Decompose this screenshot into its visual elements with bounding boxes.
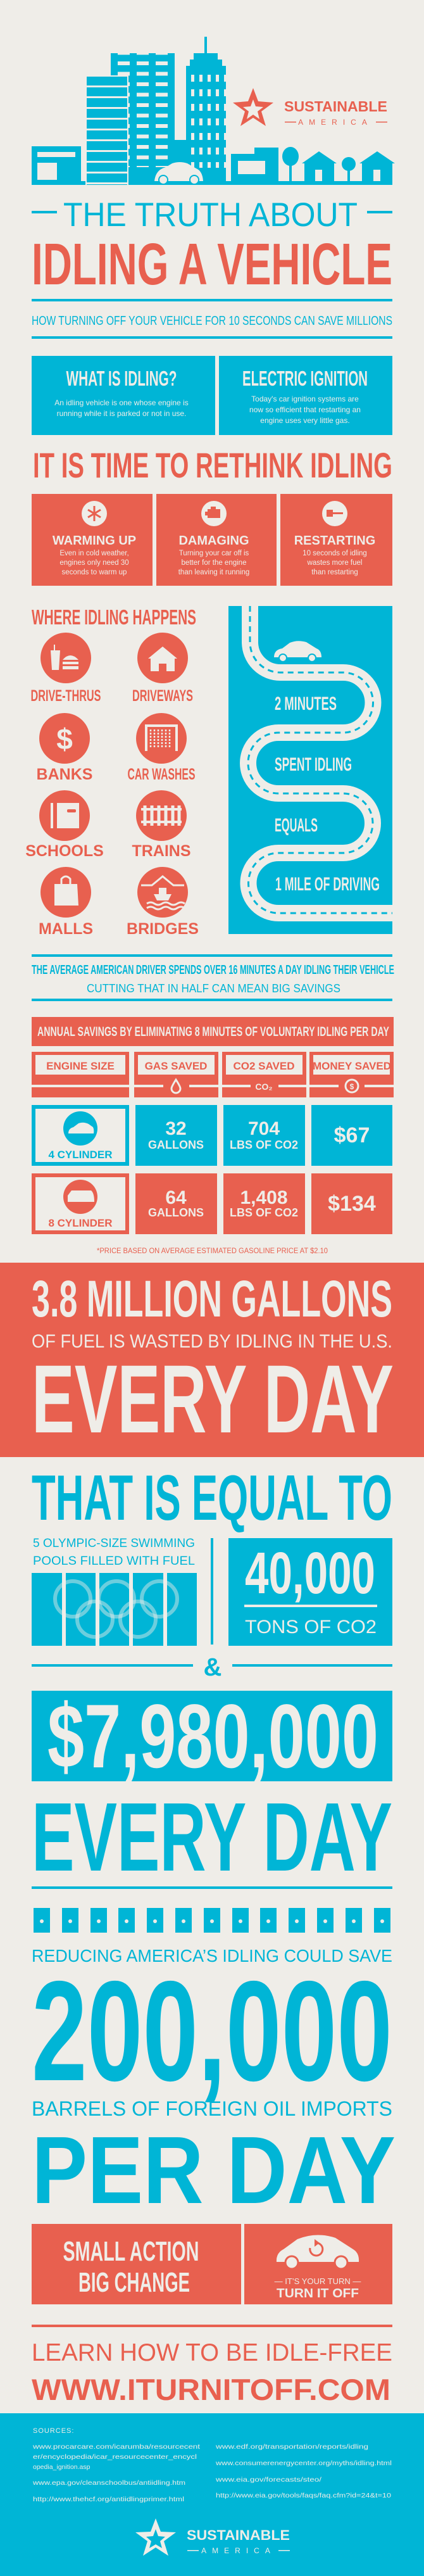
text: reducing america's idling: REDUCING AMERICA’S IDLING COULD SAVE: [32, 1946, 392, 1966]
panel: electric ignition: [219, 356, 392, 435]
row: 8 cylinder: 64: [165, 1187, 187, 1208]
icon: car with restart arrow: [277, 2235, 359, 2269]
row: 4 cylinder: LBS OF CO2: [230, 1139, 298, 1151]
panel: damaging: DAMAGING: [178, 534, 249, 548]
icon: banks: BANKS: [37, 766, 92, 783]
row: 4 cylinder: $67: [334, 1123, 370, 1147]
header: money saved: [309, 1052, 394, 1097]
icon: bridges: BRIDGES: [127, 920, 199, 938]
row: 4 cylinder: 704: [248, 1118, 280, 1139]
panel: warming up: seconds to warm up: [62, 569, 127, 576]
panel: road 2 minutes idling equals 1 mile: 2 MINUTES: [275, 693, 337, 714]
title: the truth about: THE TRUTH ABOUT: [63, 196, 358, 234]
icon: malls: [39, 867, 93, 938]
icon: trains: TRAINS: [132, 842, 191, 860]
panel: turn it off: TURN IT OFF: [277, 2287, 359, 2301]
panel: olympic pools: [32, 1537, 197, 1646]
panel: restarting: RESTARTING: [294, 534, 375, 548]
logo: sustainable america (footer): SUSTAINABLE: [187, 2527, 290, 2543]
icon: car washes: CAR WASHES: [128, 766, 195, 783]
row: 4 cylinder: GALLONS: [148, 1139, 204, 1151]
panel: what is idling: An idling vehicle is one whose engine is: [54, 398, 189, 407]
logo: sustainable america (footer): [135, 2518, 290, 2556]
panel: road 2 minutes idling equals 1 mile: [228, 606, 392, 934]
panel: olympic pools: 5 OLYMPIC-SIZE SWIMMING: [33, 1537, 195, 1550]
panel: olympic pools: POOLS FILLED WITH FUEL: [33, 1555, 195, 1568]
panel: turn it off: — IT’S YOUR TURN —: [275, 2276, 361, 2286]
footer: sources: www.epa.gov/cleanschoolbus/antiidling.htm: [32, 2479, 185, 2487]
text block: average american driver: [32, 954, 394, 1001]
row: 8 cylinder: $134: [328, 1192, 376, 1216]
panel: restarting: wastes more fuel: [307, 559, 362, 567]
footer: sources: www.procarcare.com/icarumba/resourcecent: [32, 2443, 200, 2451]
footer: sources: [0, 2413, 424, 2576]
icon: driveways: DRIVEWAYS: [132, 687, 193, 705]
logo: sustainable america (top): AMERICA: [298, 118, 373, 127]
icon: malls: MALLS: [39, 920, 93, 938]
panel: warming up: WARMING UP: [53, 534, 136, 548]
row: 8 cylinder: LBS OF CO2: [230, 1206, 298, 1219]
icon: banks: [37, 713, 92, 783]
panel: damaging: [156, 494, 277, 586]
panel: what is idling: [32, 356, 215, 435]
panel: road 2 minutes idling equals 1 mile: EQUALS: [275, 815, 318, 836]
panel: 40,000 tons of co2: [228, 1538, 392, 1646]
panel: what is idling: WHAT IS IDLING?: [66, 367, 177, 390]
footer: sources: www.edf.org/transportation/reports/idling: [215, 2443, 368, 2451]
panel: damaging: than leaving it running: [178, 569, 249, 576]
icon: drive-thrus: DRIVE-THRUS: [30, 687, 101, 705]
icon: drive-thrus: [30, 633, 101, 705]
panel: damaging: Turning your car off is: [179, 550, 249, 557]
logo: sustainable america (top): [233, 88, 387, 127]
header: gas saved: GAS SAVED: [145, 1060, 207, 1072]
row: 4 cylinder: 4 CYLINDER: [48, 1149, 113, 1161]
footer: sources: er/encyclopedia/icar_resourcecenter_encycl: [33, 2453, 197, 2461]
panel: electric ignition: engine uses very little gas.: [260, 416, 350, 425]
heading: where idling happens: WHERE IDLING HAPPENS: [32, 605, 196, 629]
header: money saved: $: [350, 1082, 354, 1091]
header: co2 saved: CO2 SAVED: [233, 1060, 295, 1072]
text: barrels of foreign oil imports: BARRELS OF FOREIGN OIL IMPORTS: [32, 2097, 392, 2120]
header: engine size: ENGINE SIZE: [46, 1060, 115, 1072]
panel: turn it off: [244, 2224, 392, 2304]
row: 4 cylinder: [32, 1105, 392, 1166]
footer: sources: http://www.thehcf.org/antiidlingprimer.html: [33, 2496, 184, 2503]
row: 8 cylinder: 1,408: [240, 1187, 288, 1208]
footer: sources: opedia_ignition.asp: [33, 2463, 90, 2471]
table: annual savings: [32, 1017, 394, 1234]
icon: schools: SCHOOLS: [25, 842, 104, 860]
icon: driveways: [132, 633, 193, 705]
icon: olympic rings: [55, 1581, 177, 1637]
panel: 3.8 million gallons every day: [0, 1263, 424, 1457]
subtitle: [32, 299, 392, 339]
panel: 40,000 tons of co2: TONS OF CO2: [245, 1617, 377, 1638]
skyline illustration: [32, 37, 395, 185]
icon: schools: [25, 790, 104, 860]
header: co2 saved: CO₂: [255, 1082, 273, 1092]
icon: key: [322, 501, 347, 526]
panel: 40,000 tons of co2: 40,000: [245, 1540, 375, 1606]
icon: car on road: [274, 641, 321, 662]
panel: restarting: [280, 494, 392, 586]
panel: warming up: engines only need 30: [59, 559, 129, 567]
panel: electric ignition: now so efficient that restarting an: [249, 405, 361, 414]
icon: snowflake: [82, 501, 107, 526]
panel: restarting: 10 seconds of idling: [302, 550, 367, 557]
header: co2 saved: [222, 1052, 306, 1097]
logo: sustainable america (footer): AMERICA: [201, 2546, 276, 2555]
ampersand divider: &: [204, 1653, 221, 1681]
panel: warming up: Even in cold weather,: [59, 550, 129, 557]
panel: damaging: better for the engine: [182, 559, 246, 567]
row: 8 cylinder: GALLONS: [148, 1206, 204, 1219]
panel: warming up: [32, 494, 153, 586]
row: 8 cylinder: 8 CYLINDER: [48, 1217, 113, 1229]
header: gas saved: [134, 1052, 218, 1097]
header: money saved: MONEY SAVED: [313, 1060, 391, 1072]
call to action: learn how: LEARN HOW TO BE IDLE-FREE: [32, 2339, 392, 2366]
panel: restarting: than restarting: [311, 569, 358, 576]
icon: trains: [132, 790, 191, 860]
footer: sources: www.consumerenergycenter.org/myths/idling.html: [215, 2459, 392, 2467]
icon: engine: [201, 501, 227, 526]
footer: sources: http://www.eia.gov/tools/faqs/faq.cfm?id=24&t=10: [216, 2492, 391, 2499]
header: engine size: [32, 1052, 129, 1097]
panel: small action big change: BIG CHANGE: [78, 2267, 190, 2298]
row: 8 cylinder: [32, 1173, 392, 1234]
panel: 3.8 million gallons every day: OF FUEL IS WASTED BY IDLING IN THE U.S.: [32, 1331, 392, 1352]
panel: small action big change: SMALL ACTION: [63, 2236, 199, 2267]
panel: road 2 minutes idling equals 1 mile: SPENT IDLING: [275, 754, 352, 775]
icon: banks: $: [56, 723, 73, 755]
call to action: url: WWW.ITURNITOFF.COM: [32, 2373, 390, 2406]
footnote: *PRICE BASED ON AVERAGE ESTIMATED GASOLINE PRICE AT $2.10: [97, 1247, 328, 1255]
panel: small action big change: [32, 2224, 241, 2304]
footer: sources: www.eia.gov/forecasts/steo/: [215, 2476, 321, 2484]
panel: what is idling: running while it is parked or not in use.: [57, 409, 186, 418]
icon: bridges: [127, 867, 199, 938]
ampersand divider: [32, 1653, 392, 1681]
footer: sources: SOURCES:: [33, 2427, 74, 2435]
text block: average american driver: CUTTING THAT IN HALF CAN MEAN BIG SAVINGS: [87, 982, 340, 995]
icon: car washes: [128, 713, 195, 783]
row: 4 cylinder: 32: [165, 1118, 187, 1139]
icon row: oil barrels: [34, 1908, 390, 1933]
panel: electric ignition: Today's car ignition systems are: [251, 395, 359, 403]
logo: sustainable america (top): SUSTAINABLE: [284, 98, 387, 115]
